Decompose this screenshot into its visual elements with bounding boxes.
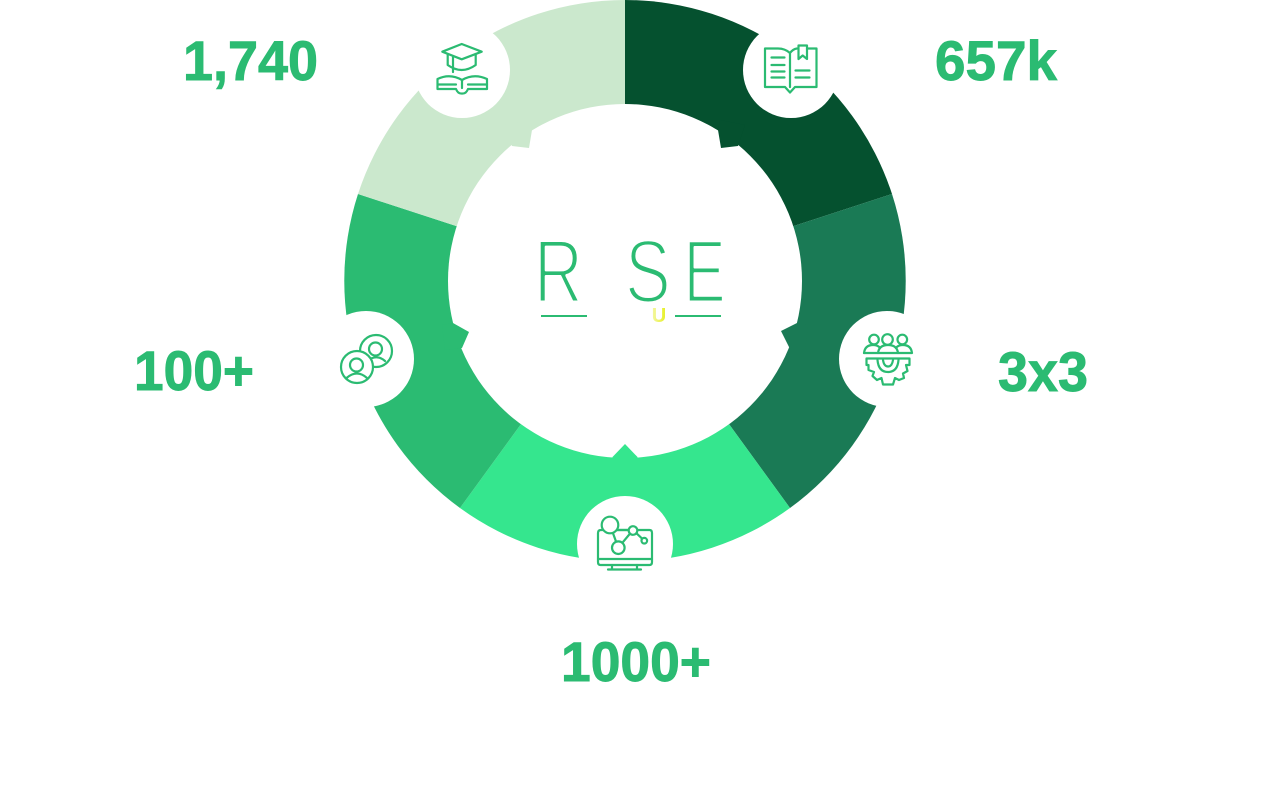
centre disc xyxy=(448,104,802,458)
stat: 657k: 657k xyxy=(935,29,1058,92)
icon: team and gear xyxy=(864,334,912,384)
tooth: light green xyxy=(505,120,532,148)
logo letter S: S xyxy=(625,221,671,321)
stat: 1,740: 1,740 xyxy=(183,29,318,92)
tooth: bright green xyxy=(612,444,638,465)
logo: RISE xyxy=(534,221,726,327)
icon: network on monitor xyxy=(598,517,652,570)
icon: two user avatars xyxy=(341,335,392,383)
logo underlines xyxy=(541,315,721,317)
icon: open book with bookmark xyxy=(765,46,816,92)
segment: bright green xyxy=(460,281,790,562)
segment: dark green xyxy=(625,0,892,281)
segment: green xyxy=(344,194,625,508)
white badge: top left xyxy=(414,22,510,118)
tooth: teal xyxy=(781,323,808,350)
segment: teal xyxy=(625,194,906,508)
stat: 100+: 100+ xyxy=(134,339,254,402)
logo letter R: R xyxy=(534,221,583,321)
icon: graduation cap on book xyxy=(438,44,487,94)
white badge: top right xyxy=(743,22,839,118)
logo accent U: U xyxy=(652,305,666,327)
segment: light green xyxy=(358,0,625,281)
logo letter E: E xyxy=(684,222,726,322)
tooth: dark green xyxy=(718,120,745,148)
stat: 3x3: 3x3 xyxy=(998,340,1088,403)
tooth: green xyxy=(442,323,469,350)
donut chart xyxy=(318,0,935,592)
white badge: bottom xyxy=(577,496,673,592)
white badge: left xyxy=(318,311,414,407)
white badge: right xyxy=(839,311,935,407)
stat: 1000+: 1000+ xyxy=(561,630,711,693)
